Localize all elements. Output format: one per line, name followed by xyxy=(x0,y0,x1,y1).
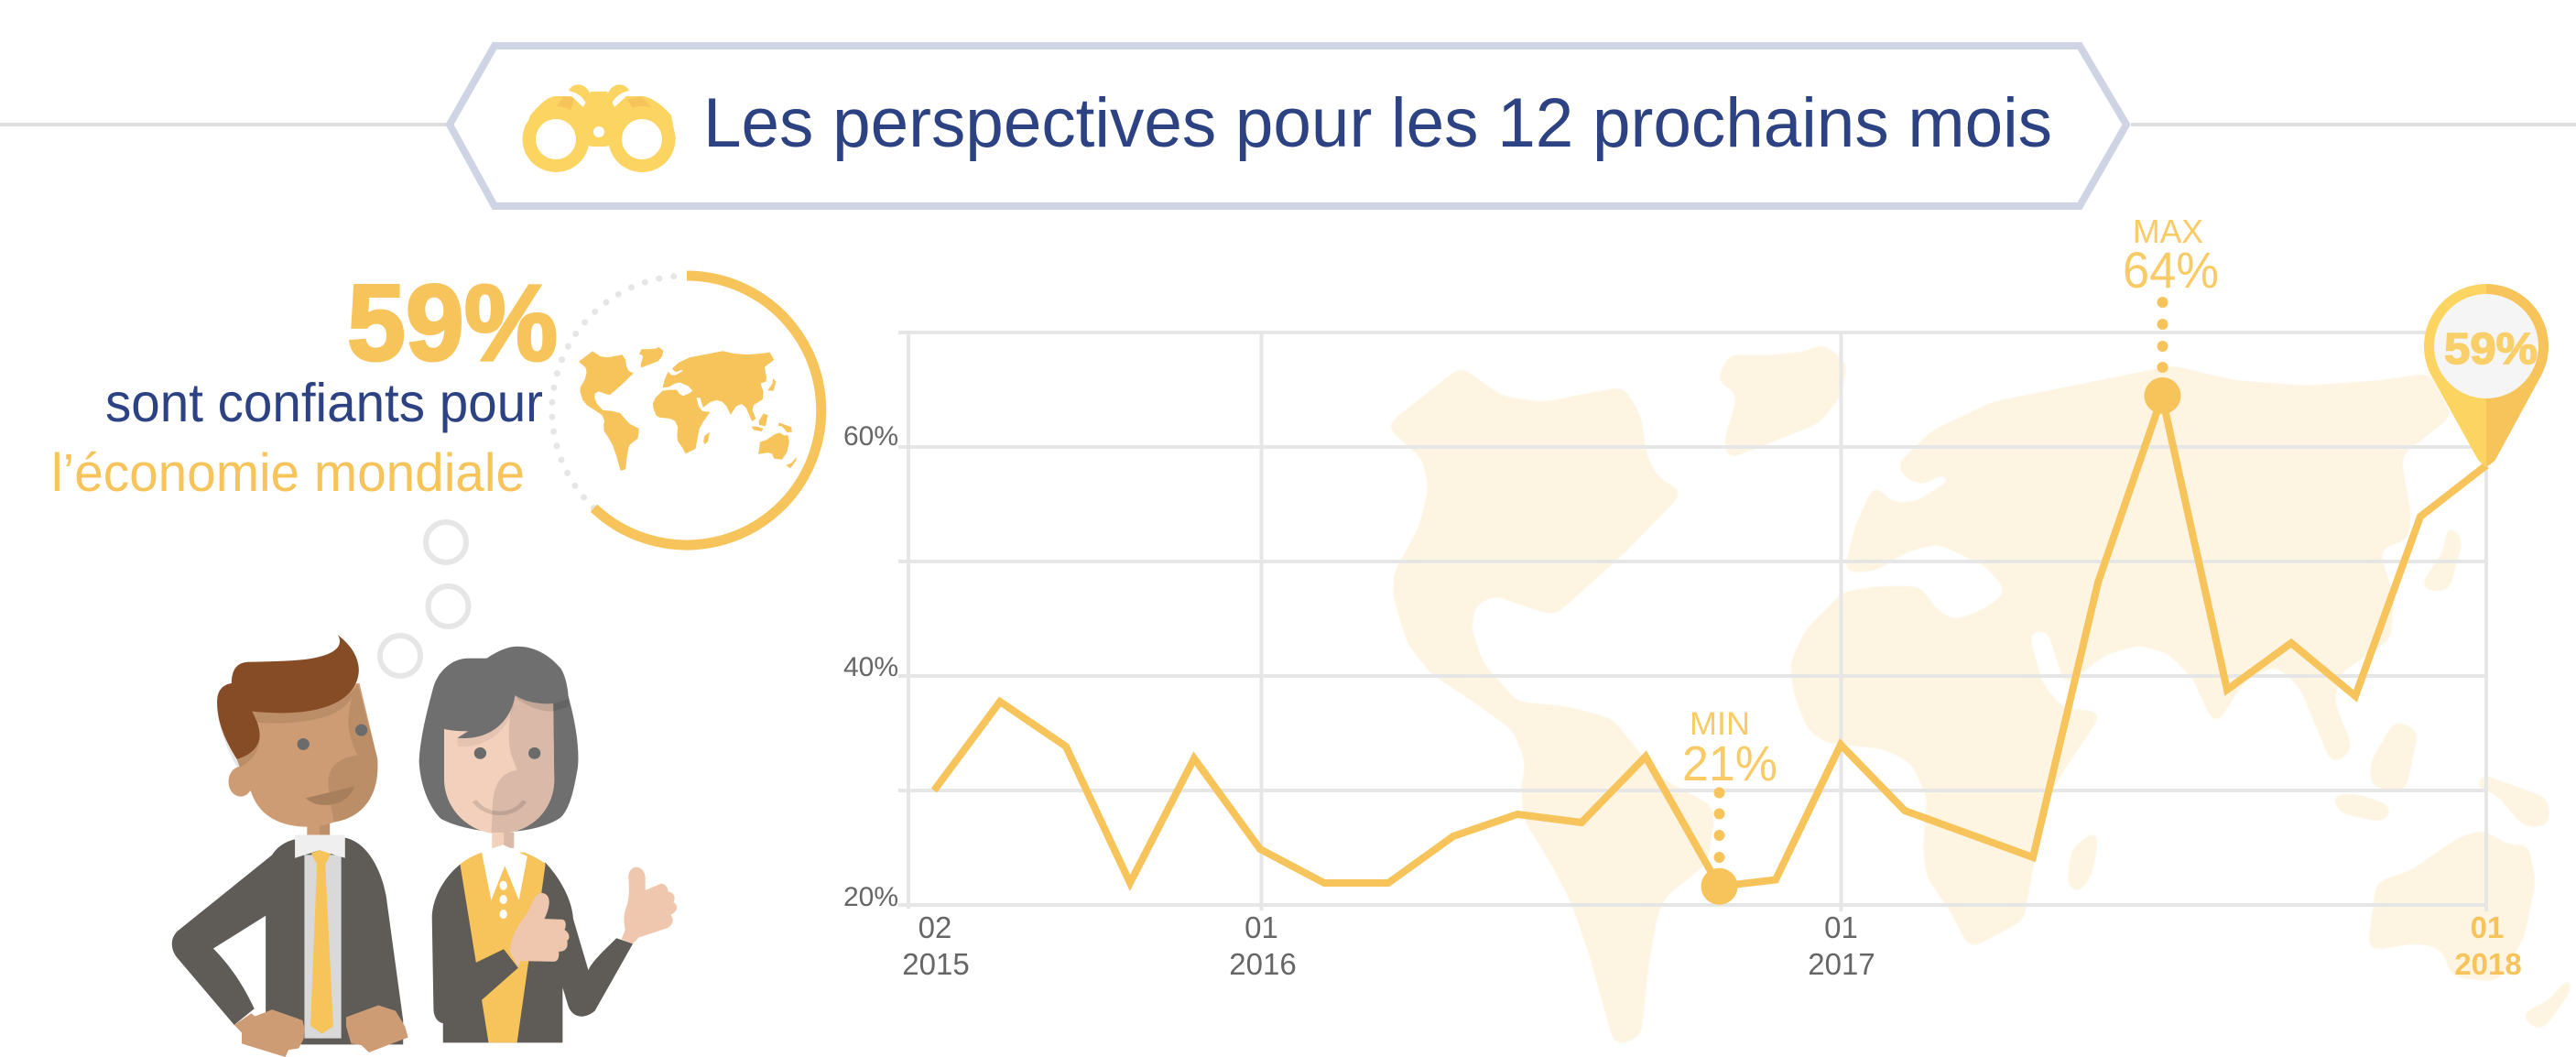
x axis labels: 2018 xyxy=(2454,947,2522,981)
x axis labels: 01 xyxy=(2471,910,2504,944)
x axis labels: 02 xyxy=(918,910,951,944)
y axis labels xyxy=(843,421,898,912)
title banner hexagon xyxy=(450,46,2126,206)
x axis labels xyxy=(902,910,2522,981)
x axis labels: 2015 xyxy=(902,947,970,981)
minimum label: 21% xyxy=(1682,736,1777,791)
maximum label: MAX xyxy=(2133,212,2203,250)
y axis labels: 60% xyxy=(843,421,898,452)
x axis labels: 2017 xyxy=(1808,947,1875,981)
character: man xyxy=(172,635,408,1057)
x axis labels: 01 xyxy=(1824,910,1858,944)
line chart xyxy=(843,212,2549,981)
y axis labels: 40% xyxy=(843,652,898,682)
title: Les perspectives pour les 12 prochains mois xyxy=(703,84,2052,162)
minimum label xyxy=(1682,706,1777,791)
thought bubbles xyxy=(380,522,469,676)
icon: world map xyxy=(579,347,797,471)
data line xyxy=(934,397,2486,887)
maximum label xyxy=(2123,212,2219,299)
minimum label: MIN xyxy=(1690,706,1750,742)
minimum marker xyxy=(1701,788,1738,905)
maximum label: 64% xyxy=(2123,241,2219,299)
text: sont confiants pour: sont confiants pour xyxy=(105,373,543,433)
text: l'économie mondiale: l’économie mondiale xyxy=(51,443,525,503)
header rule left xyxy=(0,123,446,126)
map pin: current value xyxy=(2424,284,2549,466)
map pin: current value: 59% xyxy=(2444,325,2538,374)
stat: 59%: 59% xyxy=(347,263,558,384)
donut gauge with world icon xyxy=(552,276,821,545)
maximum marker xyxy=(2145,297,2181,414)
y axis labels: 20% xyxy=(843,882,898,912)
background world map xyxy=(1386,343,2576,1046)
x axis labels: 2016 xyxy=(1229,947,1297,981)
header rule right xyxy=(2131,123,2576,126)
character: woman xyxy=(419,647,677,1042)
x axis labels: 01 xyxy=(1245,910,1278,944)
icon: binoculars xyxy=(522,84,676,172)
